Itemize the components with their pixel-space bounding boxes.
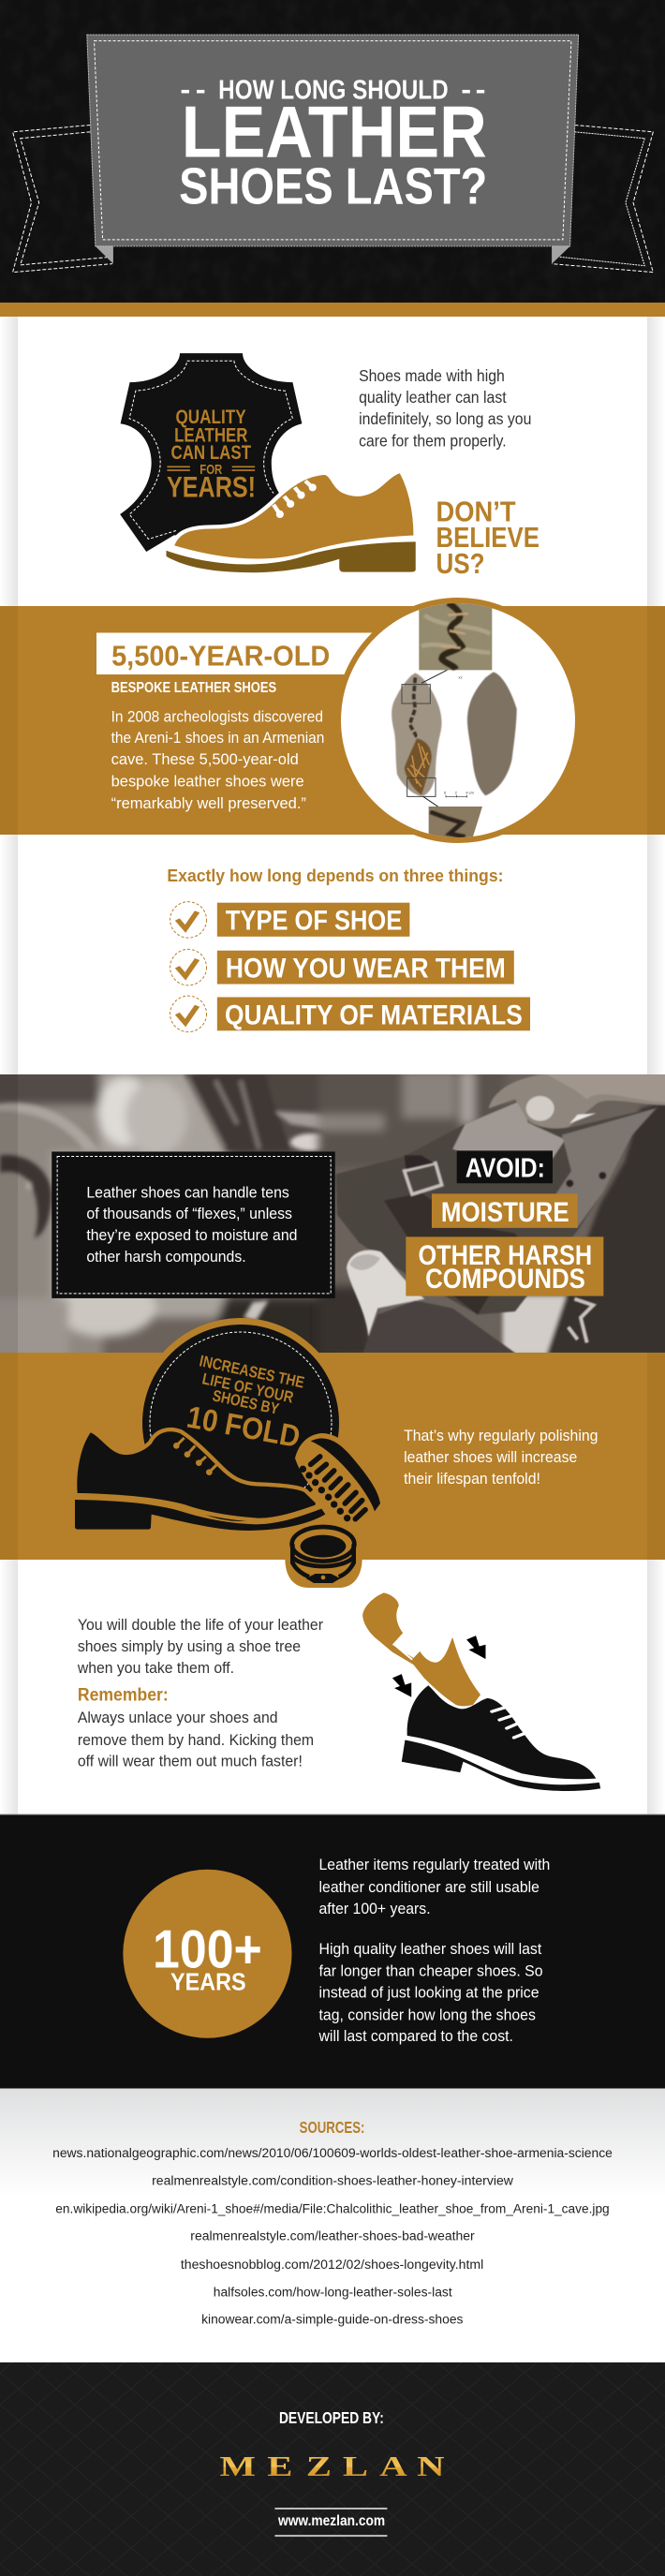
intro text: care for them properly. (359, 432, 507, 450)
badge text: SHOES BY (211, 1386, 281, 1418)
don't believe us heading: DON’T (436, 496, 516, 527)
sources list: realmenrealstyle.com/leather-shoes-bad-weather (190, 2228, 475, 2243)
icon: black shoe (75, 1429, 325, 1531)
intro text: quality leather can last (359, 389, 507, 407)
100+ years text (318, 1856, 550, 2044)
100+ years text: will last compared to the cost. (318, 2027, 513, 2044)
badge text: QUALITY (175, 406, 246, 428)
shoe tree text: You will double the life of your leather (78, 1616, 323, 1634)
ribbon tail stitching left (13, 125, 112, 273)
arrow: right (466, 1636, 485, 1659)
sources list: kinowear.com/a-simple-guide-on-dress-shoes (201, 2312, 463, 2327)
badge text: CAN LAST (170, 441, 251, 464)
icon: ten fold badge (136, 1318, 346, 1528)
avoid label: AVOID: (466, 1153, 545, 1183)
badge text: YEARS! (167, 470, 256, 503)
photo overlays (52, 1150, 603, 1298)
logo: Mezlan: MEZLAN (220, 2450, 445, 2482)
panel: 5,500 year old shoes (0, 598, 665, 843)
scale bar: 0 (444, 791, 447, 795)
developed by: DEVELOPED BY: (279, 2409, 384, 2427)
top hand (489, 1071, 665, 1129)
panel: sources (0, 2089, 665, 2362)
icon: gold shoe (167, 471, 416, 572)
intro section (120, 353, 539, 579)
shoe tree text: shoes simply by using a shoe tree (78, 1637, 301, 1654)
website (274, 2508, 387, 2537)
paragraph: bespoke leather shoes were (111, 773, 304, 791)
photo side shading (0, 1074, 18, 1353)
title: HOW LONG SHOULD (218, 76, 449, 105)
gold band (0, 606, 665, 835)
item: type of shoe (170, 902, 409, 938)
polishing text: leather shoes will increase (404, 1449, 577, 1466)
badge text: FOR (200, 463, 222, 478)
moisture label: MOISTURE (441, 1197, 569, 1228)
archaeological shoe photo (392, 600, 517, 841)
three things heading: Exactly how long depends on three things: (167, 866, 503, 885)
shoe tree text: when you take them off. (77, 1659, 234, 1677)
other harsh compounds label: COMPOUNDS (425, 1264, 585, 1295)
shoe tree text: off will wear them out much faster! (78, 1753, 303, 1769)
white heading tab (96, 633, 373, 674)
shoe tree text (77, 1616, 323, 1769)
item: how you wear them (170, 949, 514, 985)
icon: leather hide badge (120, 353, 302, 552)
website: www.mezlan.com (277, 2512, 385, 2528)
badge text: LEATHER (174, 423, 247, 446)
100+ years circle: YEARS (170, 1969, 246, 1996)
polishing text: their lifespan tenfold! (404, 1471, 540, 1488)
scale bar (444, 675, 475, 797)
page background panels (0, 317, 665, 1815)
badge text: INCREASES THE (198, 1352, 306, 1392)
intro text (359, 367, 531, 450)
paragraph: “remarkably well preserved.” (111, 795, 306, 812)
paragraph: the Areni-1 shoes in an Armenian (111, 730, 324, 747)
title: - - (461, 74, 485, 105)
100+ years text: far longer than cheaper shoes. So (319, 1962, 543, 1979)
sources heading: SOURCES: (300, 2119, 364, 2137)
title (179, 74, 487, 215)
don't believe us heading: BELIEVE (436, 522, 539, 554)
100+ years circle (123, 1870, 292, 2038)
sources list: realmenrealstyle.com/condition-shoes-leather-honey-interview (152, 2173, 514, 2188)
100+ years text: instead of just looking at the price (319, 1984, 539, 2001)
photo: shoemaker hands and leather shoe (0, 1068, 665, 1361)
100+ years text: tag, consider how long the shoes (319, 2006, 536, 2023)
title: SHOES LAST? (179, 158, 487, 215)
title: - - (180, 74, 206, 105)
item: quality of materials: QUALITY OF MATERIALS (225, 999, 523, 1030)
right shoe (467, 672, 517, 795)
header: leather background (0, 0, 665, 317)
panel: footer (0, 2362, 665, 2576)
badge text (167, 406, 256, 503)
title ribbon banner (13, 35, 653, 273)
bottom close-up photo (429, 807, 482, 837)
photo left: polishing wheel (0, 1068, 340, 1361)
sources list: halfsoles.com/how-long-leather-soles-last (214, 2285, 452, 2300)
banner stitching (87, 35, 579, 246)
grey banner panel (86, 35, 579, 245)
flexes callout box (52, 1151, 335, 1298)
subheading: BESPOKE LEATHER SHOES (111, 679, 276, 696)
sources list: theshoesnobblog.com/2012/02/shoes-longevity.html (181, 2257, 483, 2272)
100+ years text: Leather items regularly treated with (319, 1856, 550, 1873)
heading: 5,500-year-old: 5,500-YEAR-OLD (111, 640, 330, 672)
buckle (405, 1163, 442, 1194)
scale bar: 4 cm (466, 791, 475, 795)
flexes callout box: Leather shoes can handle tens (86, 1184, 289, 1202)
paragraph: cave. These 5,500-year-old (111, 751, 299, 768)
scale bar: 2 (455, 791, 458, 795)
100+ years text: after 100+ years. (319, 1900, 431, 1917)
arrow: left (392, 1674, 411, 1697)
icon: polish tin (285, 1521, 362, 1588)
badge text: 10 FOLD (185, 1399, 303, 1454)
paragraph: In 2008 archeologists discovered (111, 708, 323, 726)
item: how you wear them: HOW YOU WEAR THEM (226, 954, 506, 984)
item: quality of materials (170, 996, 530, 1032)
panel: polishing band (0, 1353, 665, 1560)
ribbon tail stitching right (552, 125, 653, 273)
icon: shoe tree (362, 1592, 480, 1706)
left shoe (392, 670, 447, 808)
leather shoe body (335, 1098, 658, 1314)
scale bar: x2 (458, 675, 463, 680)
shoe tree text: Remember: (78, 1684, 169, 1705)
shoes text (111, 640, 530, 1032)
avoid label (457, 1150, 553, 1183)
don't believe us heading: US? (436, 547, 485, 579)
paragraph (111, 708, 324, 812)
title: LEATHER (182, 91, 487, 173)
icon: shoe brush (295, 1433, 382, 1525)
don't believe us heading (436, 496, 539, 579)
flexes callout box: they’re exposed to moisture and (86, 1227, 297, 1244)
shoe tree section (77, 1592, 600, 1791)
intro text: indefinitely, so long as you (359, 410, 531, 428)
flexes callout box: of thousands of “flexes,” unless (86, 1206, 292, 1222)
black shoe, brush and polish tin (75, 1429, 382, 1588)
sources list (52, 2145, 613, 2327)
shoe tree text: remove them by hand. Kicking them (78, 1731, 314, 1748)
badge text (185, 1352, 306, 1454)
100+ years text: High quality leather shoes will last (319, 1940, 542, 1958)
icon: black shoe with tree (402, 1685, 600, 1791)
checklist (170, 902, 530, 1032)
sleeve (362, 1300, 518, 1355)
lower thumb (347, 1251, 424, 1337)
panel: 100+ years (0, 1814, 665, 2089)
shoe tree text: Always unlace your shoes and (78, 1709, 278, 1725)
badge text: LIFE OF YOUR (200, 1369, 295, 1406)
100+ years text: leather conditioner are still usable (319, 1878, 539, 1896)
circular photo frame (335, 598, 581, 843)
item: type of shoe: TYPE OF SHOE (226, 906, 402, 936)
photo right: hands and shoe (318, 1068, 665, 1358)
moisture label (432, 1193, 578, 1228)
banner folds (95, 245, 570, 264)
top close-up photo (419, 600, 492, 670)
polishing text (404, 1428, 598, 1488)
flexes callout box: other harsh compounds. (86, 1249, 246, 1266)
intro text: Shoes made with high (359, 367, 505, 385)
100+ years circle: 100+ (153, 1919, 262, 1979)
other harsh compounds label (406, 1236, 603, 1296)
